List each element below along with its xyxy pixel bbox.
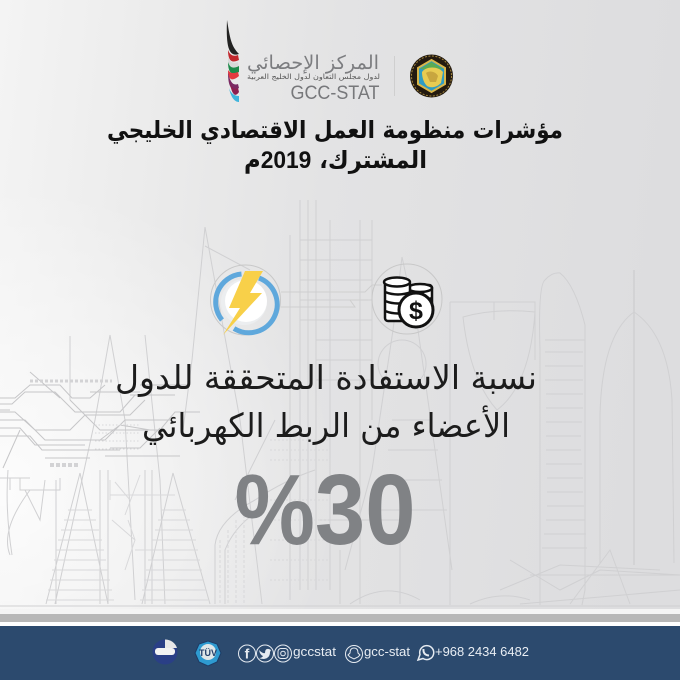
phone number: +968 2434 6482 (435, 644, 529, 659)
coin stack left (384, 278, 432, 321)
icon: coins: $ (409, 297, 423, 325)
skyline hatching (30, 381, 330, 604)
logo ribbon (227, 20, 239, 102)
handle: gccstat: gccstat (293, 644, 336, 659)
logo Arabic name: المركز الإحصائي (247, 52, 379, 74)
icon: facebook: f (245, 646, 250, 662)
icon: whatsapp (418, 646, 434, 660)
footer bar (0, 626, 680, 680)
icon: snapchat (346, 646, 362, 662)
percentage value: %30 (234, 454, 416, 566)
logo: GCC-STAT (227, 20, 380, 104)
logo GCC-STAT wordmark: GCC-STAT (290, 82, 380, 104)
dollar coin (399, 293, 433, 327)
white strip (0, 622, 680, 626)
title (107, 116, 563, 174)
logo Arabic tagline: لدول مجلس التعاون لدول الخليج العربية (247, 73, 380, 81)
subtitle line 1: نسبة الاستفادة المتحققة للدول (115, 358, 537, 397)
icon: coins (372, 264, 442, 334)
icon: instagram (274, 645, 292, 662)
grey strip (0, 614, 680, 622)
subtitle (115, 358, 537, 445)
icon: GCC emblem (410, 54, 453, 98)
skyline illustration (0, 200, 680, 606)
handle: gcc-stat: gcc-stat (364, 644, 410, 659)
badge: TUV (195, 641, 221, 666)
icon: twitter (256, 645, 274, 662)
subtitle line 2: الأعضاء من الربط الكهربائي (142, 405, 510, 445)
title line 1: مؤشرات منظومة العمل الاقتصادي الخليجي (107, 116, 563, 144)
connector lines between icons (281, 285, 382, 307)
badge: TUV: TÜV (199, 648, 217, 658)
title line 2: المشترك، 2019م (244, 146, 427, 174)
icon: electricity (210, 265, 280, 335)
social icons (238, 645, 292, 662)
badge: certification (152, 639, 178, 664)
